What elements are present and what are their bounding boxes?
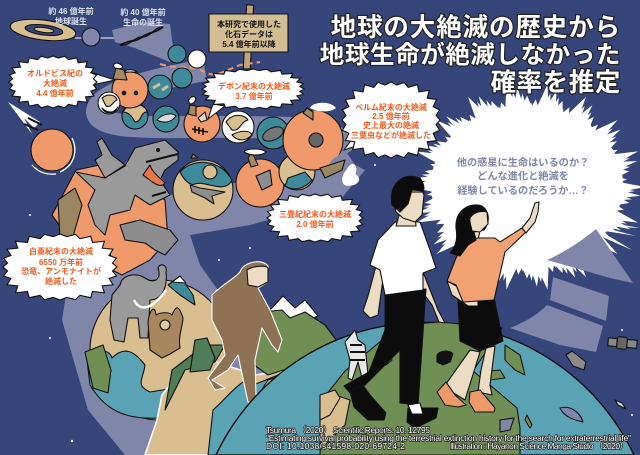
callout: Permian extinction: 三葉虫などが絶滅した xyxy=(351,130,431,140)
callout: Ordovician extinction xyxy=(9,56,115,108)
credits: DOI: 10.1038/s41598-020-69724-2 xyxy=(266,441,405,451)
globe with mammoth xyxy=(85,276,230,420)
credits xyxy=(266,425,631,451)
planets: timeline of globes xyxy=(98,45,289,149)
ammonite globe xyxy=(173,154,233,220)
mammoth xyxy=(110,265,166,342)
credits: Tsumura （2020） Scientific Reports. 10. 12795 xyxy=(266,425,430,435)
sign: fossil data since 540 Ma: 5.4 億年前以降 xyxy=(222,39,276,49)
ape-man xyxy=(208,262,282,405)
callout: Cretaceous extinction xyxy=(3,234,117,300)
man walking xyxy=(344,176,445,428)
monkey xyxy=(148,308,183,358)
callout: Cretaceous extinction: 絶滅した xyxy=(45,276,77,286)
credits: Illustration : Hayanon Science Manga Studio （2020） xyxy=(450,441,628,451)
callout: Triassic extinction: 2.0 億年前 xyxy=(296,219,334,229)
burst rays over arrow xyxy=(598,222,640,250)
growth arrow xyxy=(510,229,633,352)
meteor xyxy=(8,102,75,174)
label: earth birth: 約 46 億年前 xyxy=(48,6,94,16)
main earth xyxy=(216,322,634,455)
protoplanetary disc xyxy=(9,16,77,44)
whale xyxy=(615,400,626,409)
third continent: big tan land xyxy=(145,345,360,455)
ship xyxy=(566,351,586,370)
life cloud with DNA xyxy=(112,22,174,62)
label: life birth: 生命の誕生 xyxy=(123,17,163,27)
callout: Ordovician extinction: 大絶滅 xyxy=(43,78,67,88)
callout: Triassic extinction: 三畳紀紀末の大絶滅 xyxy=(279,209,351,219)
title: 地球の大絶滅の歴史から xyxy=(331,14,621,42)
dashed line marking 5.4 Ga xyxy=(160,62,260,74)
woman pointing xyxy=(437,202,539,412)
animal: brown creature xyxy=(278,385,310,420)
orange impact globe xyxy=(52,165,168,275)
callout: Permian extinction: 2.5 億年前 xyxy=(372,111,410,121)
Tyrannosaurus xyxy=(76,140,178,235)
title: 確率を推定 xyxy=(490,69,621,97)
callout: Devonian extinction: 3.7 億年前 xyxy=(235,91,273,101)
callout: Triassic extinction xyxy=(267,194,363,242)
title: 地球生命が絶滅しなかった xyxy=(320,40,621,69)
label: life birth xyxy=(120,7,166,27)
stars xyxy=(29,164,633,443)
volcanoes with smoke xyxy=(113,63,196,116)
early earth xyxy=(75,28,165,46)
callout: Cretaceous extinction: 恐竜、アンモナイトが xyxy=(21,266,101,276)
callout: Devonian extinction xyxy=(202,69,304,119)
callout: Ordovician extinction: オルドビス紀の xyxy=(27,68,83,78)
forest and snowy mountains xyxy=(190,296,340,375)
sign: fossil data since 540 Ma xyxy=(209,5,288,69)
satellite xyxy=(608,336,637,350)
burst question text: 経験しているのだろうか…？ xyxy=(457,184,589,197)
callout: Permian extinction xyxy=(342,82,440,158)
sign: fossil data since 540 Ma: 化石データは xyxy=(225,29,273,39)
Permian globes xyxy=(279,103,359,190)
burst question text: 他の惑星に生命はいるのか？ xyxy=(457,156,589,169)
credits: "Estimating survival probability using the terrestrial extinction history for the search for extraterrestrial life" xyxy=(266,433,631,443)
label: life birth: 約 40 億年前 xyxy=(120,7,166,17)
earth animals: zebras and panda xyxy=(320,330,453,420)
cracked orange globe xyxy=(236,149,284,207)
sign: fossil data since 540 Ma: 本研究で使用した xyxy=(217,19,281,29)
burst question text xyxy=(457,156,589,197)
title xyxy=(320,14,621,97)
callout: Cretaceous extinction: 6550 万年前 xyxy=(39,257,83,267)
callout: Cretaceous extinction: 白亜紀末の大絶滅 xyxy=(29,246,93,256)
callout: Permian extinction: ペルム紀末の大絶滅 xyxy=(355,102,427,112)
speech burst xyxy=(404,80,640,294)
orange land tail xyxy=(58,188,82,240)
burst question text: どんな進化と絶滅を xyxy=(477,170,569,182)
wolf creature xyxy=(120,220,178,255)
history band: pale path of time xyxy=(62,70,365,455)
callout: Permian extinction: 史上最大の絶滅 xyxy=(363,120,419,130)
sauropods in background xyxy=(95,138,125,178)
callout: Devonian extinction: デボン紀末の大絶滅 xyxy=(218,81,290,91)
callout: Ordovician extinction: 4.4 億年前 xyxy=(36,88,74,98)
label: earth birth: 地球誕生 xyxy=(55,16,87,26)
label: earth birth xyxy=(48,6,94,26)
